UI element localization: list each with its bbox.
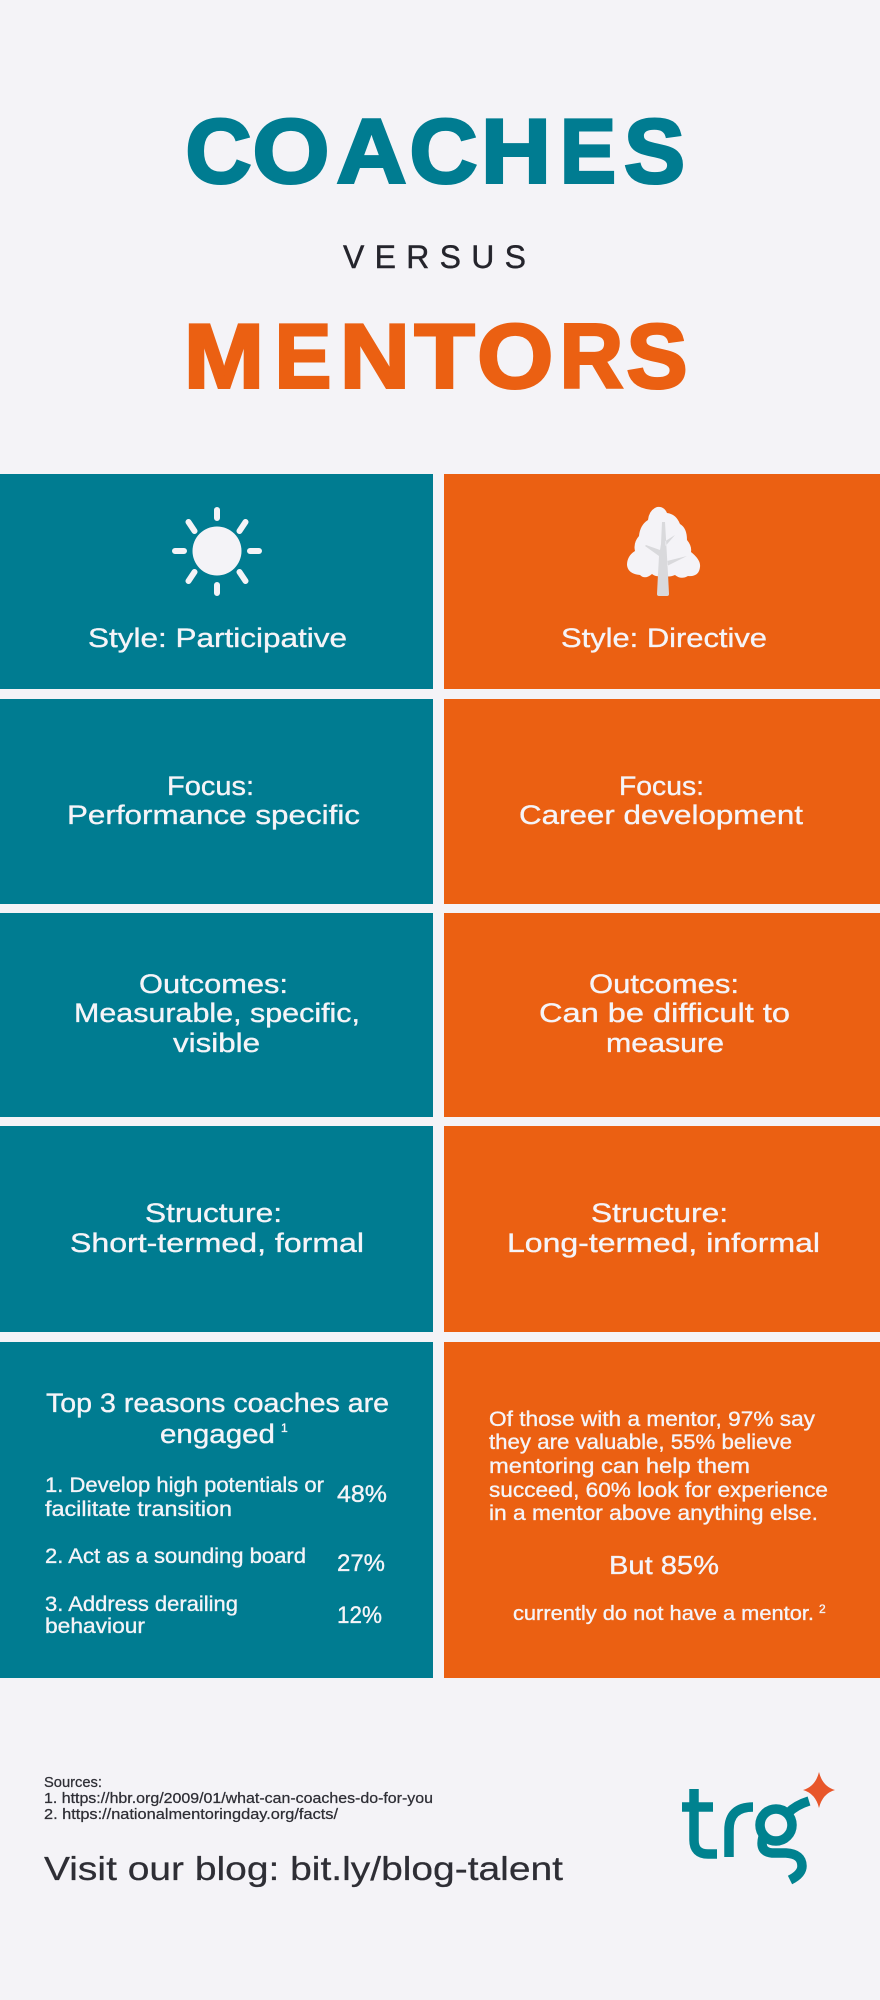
panel: coaches focus: Focus: xyxy=(167,771,254,801)
panel: coaches outcomes: visible xyxy=(173,1028,260,1058)
heading: coaches: C xyxy=(410,102,478,202)
heading: mentors: R xyxy=(560,306,623,408)
heading: versus: VERSUS xyxy=(343,239,526,275)
list item: reason 3: behaviour xyxy=(45,1614,145,1638)
text: mentor statistics paragraph: in a mentor above anything else. xyxy=(489,1501,818,1525)
list item: reason 1: facilitate transition xyxy=(45,1497,232,1521)
panel: mentors focus xyxy=(444,699,880,904)
panel: mentors outcomes xyxy=(444,913,880,1117)
icon: star xyxy=(803,1772,835,1808)
text: mentor statistics paragraph: they are valuable, 55% believe xyxy=(489,1430,792,1454)
heading: top 3 reasons: Top 3 reasons coaches are xyxy=(46,1388,389,1418)
panel: coaches outcomes xyxy=(0,913,433,1117)
panel: coaches style xyxy=(0,474,433,689)
panel: mentors structure: Long-termed, informal xyxy=(507,1228,820,1258)
list item: reason 1 xyxy=(45,1473,387,1521)
heading: top 3 reasons: engaged xyxy=(160,1419,275,1449)
panel: mentors structure xyxy=(444,1126,880,1332)
panel: coaches structure: Short-termed, formal xyxy=(70,1228,364,1258)
list item: reason 1: 1. Develop high potentials or xyxy=(45,1473,324,1497)
list item: reason 2: 27% xyxy=(337,1550,385,1577)
heading: coaches: O xyxy=(252,102,330,202)
text: no mentor note: 2 xyxy=(819,1602,826,1616)
panel: coaches structure xyxy=(0,1126,433,1332)
text: mentor statistics paragraph: succeed, 60% look for experience xyxy=(489,1478,828,1502)
heading: mentors: S xyxy=(626,306,688,408)
title xyxy=(184,102,688,408)
panel: mentors outcomes: Outcomes: xyxy=(589,969,739,999)
heading: mentors: M xyxy=(184,306,264,408)
heading: mentors: T xyxy=(414,306,475,408)
logo: trg xyxy=(682,1772,835,1880)
panel: mentors focus: Career development xyxy=(519,800,804,830)
text: sources: Sources: xyxy=(44,1774,102,1791)
heading: coaches: A xyxy=(336,102,406,202)
panel: coaches outcomes: Measurable, specific, xyxy=(74,998,360,1028)
callout: but 85%: But 85% xyxy=(609,1550,719,1580)
text: mentor statistics paragraph: Of those with a mentor, 97% say xyxy=(489,1407,815,1431)
panel: coaches outcomes: Outcomes: xyxy=(139,969,288,999)
panel: mentoring statistics xyxy=(444,1342,880,1678)
list item: reason 2: 2. Act as a sounding board xyxy=(45,1544,306,1568)
list item: reason 1: 48% xyxy=(337,1481,387,1508)
list item: reason 3 xyxy=(45,1592,382,1638)
heading: mentors: N xyxy=(340,306,410,408)
panel: coaches structure: Structure: xyxy=(145,1198,282,1228)
panel: coaches focus: Performance specific xyxy=(67,800,360,830)
panel: coaches focus xyxy=(0,699,433,904)
heading: mentors: O xyxy=(477,306,553,408)
icon: sun xyxy=(175,510,259,593)
panel: mentors focus: Focus: xyxy=(619,771,704,801)
text: mentor statistics paragraph xyxy=(489,1407,828,1525)
heading: coaches: H xyxy=(481,102,551,202)
text: style participative: Style: Participative xyxy=(88,623,347,653)
panel: mentors outcomes: Can be difficult to xyxy=(539,998,790,1028)
panel: mentors outcomes: measure xyxy=(606,1028,724,1058)
text: style directive: Style: Directive xyxy=(561,623,767,653)
heading: coaches: E xyxy=(560,102,616,202)
heading: coaches: C xyxy=(186,102,252,202)
text: sources: 2. https://nationalmentoringday.org/facts/ xyxy=(44,1806,339,1823)
panel: mentors style xyxy=(444,474,880,689)
list item: reason 3: 12% xyxy=(337,1602,382,1629)
text: sources xyxy=(44,1774,433,1823)
text: no mentor note: currently do not have a mentor. xyxy=(513,1603,814,1625)
list item: reason 2 xyxy=(45,1544,385,1577)
heading: top 3 reasons: 1 xyxy=(281,1421,288,1435)
text: mentor statistics paragraph: mentoring can help them xyxy=(489,1454,750,1478)
panel: top 3 reasons coaches are engaged xyxy=(0,1342,433,1678)
text: sources: 1. https://hbr.org/2009/01/what-can-coaches-do-for-you xyxy=(44,1790,433,1807)
list item: reason 3: 3. Address derailing xyxy=(45,1592,238,1616)
heading: coaches: S xyxy=(624,102,685,202)
text: blog link: Visit our blog: bit.ly/blog-talent xyxy=(44,1850,563,1887)
heading: mentors: E xyxy=(275,306,331,408)
heading: top 3 reasons xyxy=(46,1388,389,1449)
icon: tree xyxy=(627,507,700,596)
panel: mentors structure: Structure: xyxy=(591,1198,728,1228)
